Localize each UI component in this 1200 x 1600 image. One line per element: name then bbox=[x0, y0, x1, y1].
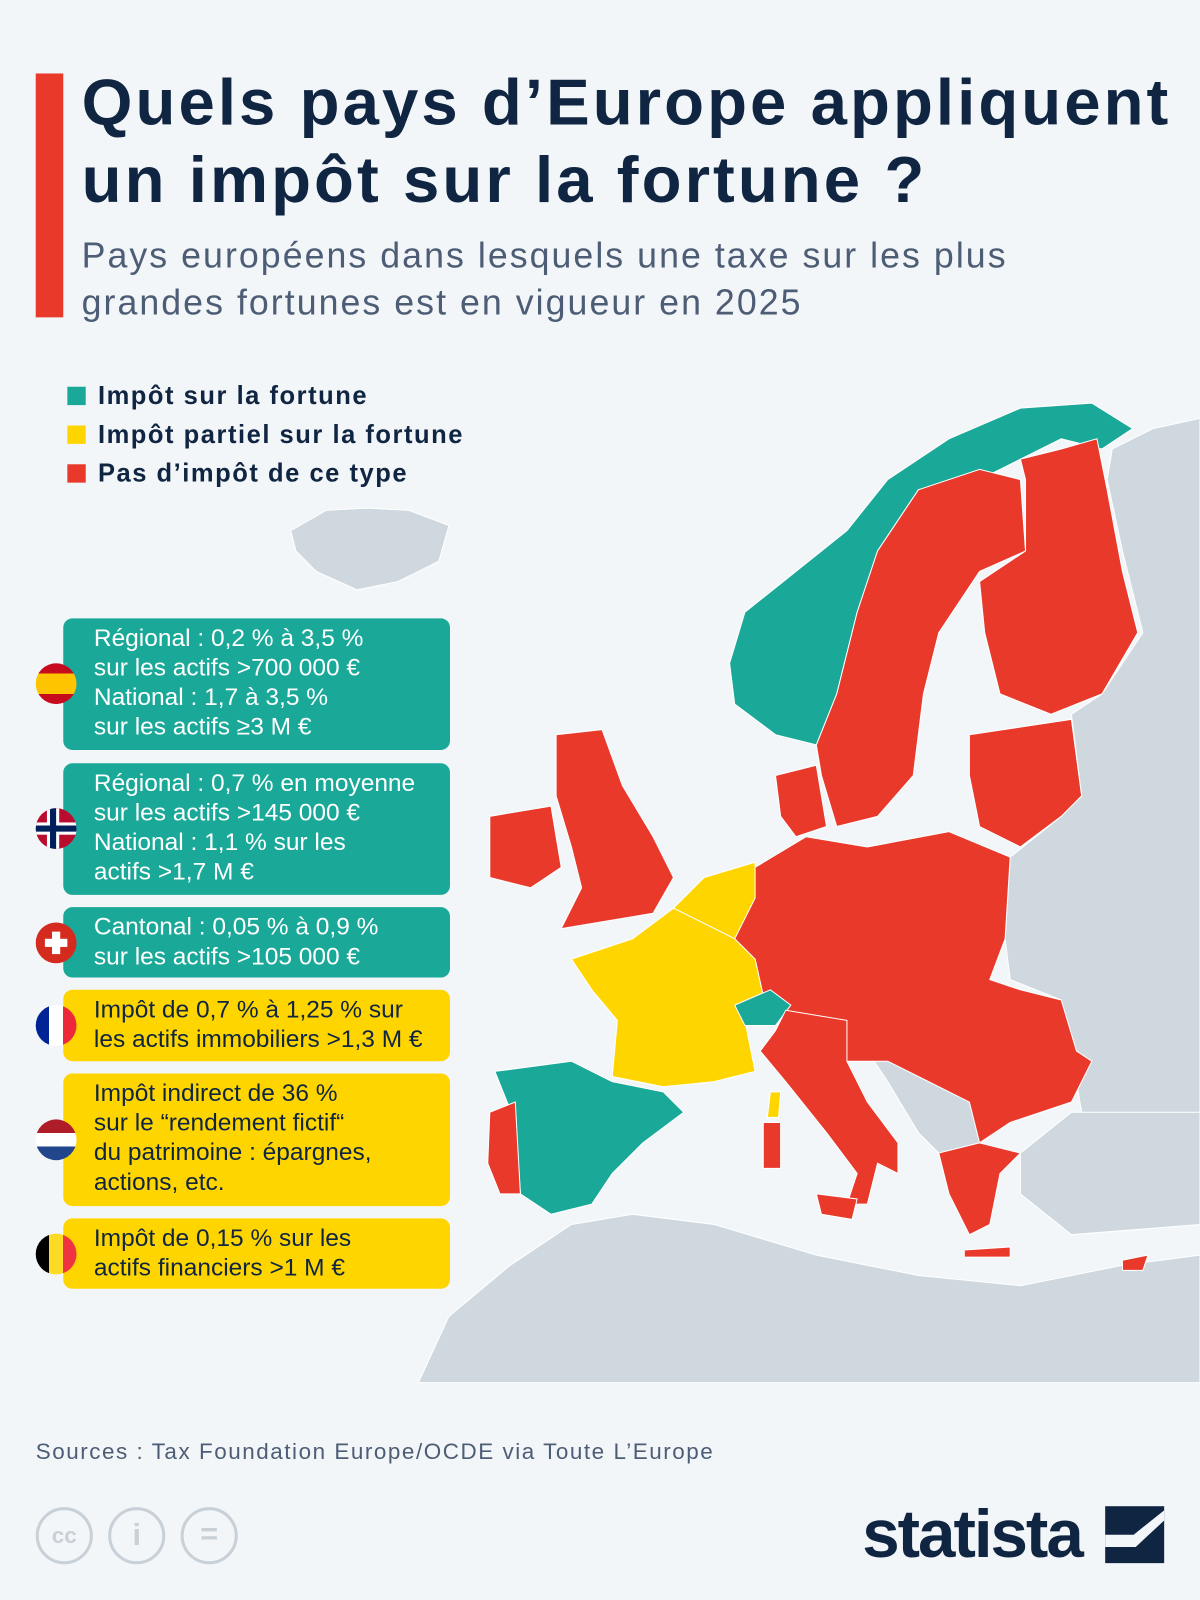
box: Switzerland bbox=[63, 907, 450, 978]
box: Norway: sur les actifs >145 000 € bbox=[94, 799, 360, 827]
subtitle: Pays européens dans lesquels une taxe sur les plus bbox=[82, 236, 1008, 276]
legend bbox=[67, 382, 464, 488]
box: Switzerland: Cantonal : 0,05 % à 0,9 % bbox=[94, 913, 378, 941]
box: Spain: National : 1,7 à 3,5 % bbox=[94, 684, 328, 711]
license icons: cc bbox=[52, 1522, 77, 1548]
box: Norway bbox=[63, 763, 450, 895]
box: Spain: sur les actifs >700 000 € bbox=[94, 654, 360, 682]
subtitle bbox=[82, 236, 1008, 322]
box: Netherlands: actions, etc. bbox=[94, 1168, 225, 1196]
box: Netherlands: du patrimoine : épargnes, bbox=[94, 1139, 372, 1166]
box: Spain bbox=[63, 618, 450, 750]
license icons: i bbox=[132, 1518, 141, 1552]
logo: statista: statista bbox=[862, 1496, 1082, 1571]
box: Netherlands bbox=[63, 1073, 450, 1206]
license icons: = bbox=[200, 1517, 218, 1551]
box: Netherlands: Impôt indirect de 36 % bbox=[94, 1080, 338, 1107]
box: France bbox=[63, 990, 450, 1061]
box: Belgium bbox=[63, 1218, 450, 1289]
box: France: les actifs immobiliers >1,3 M € bbox=[94, 1026, 423, 1053]
flag: Belgium bbox=[36, 1234, 77, 1274]
legend item: none: Pas d’impôt de ce type bbox=[98, 459, 408, 488]
flag: Norway bbox=[36, 808, 77, 849]
box: Belgium: actifs financiers >1 M € bbox=[94, 1254, 345, 1282]
title: Quels pays d’Europe appliquent bbox=[82, 65, 1171, 139]
box: Norway: National : 1,1 % sur les bbox=[94, 829, 346, 856]
legend item: partial: Impôt partiel sur la fortune bbox=[98, 420, 464, 449]
box: Spain: sur les actifs ≥3 M € bbox=[94, 713, 311, 741]
license icons bbox=[36, 1507, 238, 1564]
box: Netherlands: sur le “rendement fictif“ bbox=[94, 1109, 344, 1137]
subtitle: grandes fortunes est en vigueur en 2025 bbox=[82, 283, 803, 322]
title bbox=[82, 65, 1171, 216]
box: Spain: Régional : 0,2 % à 3,5 % bbox=[94, 624, 363, 652]
box: Norway: Régional : 0,7 % en moyenne bbox=[94, 769, 415, 797]
legend item: full tax: Impôt sur la fortune bbox=[98, 382, 368, 410]
flag: Switzerland bbox=[36, 922, 77, 963]
flag: Netherlands bbox=[36, 1119, 77, 1160]
sources: Sources : Tax Foundation Europe/OCDE via Toute L’Europe bbox=[36, 1439, 714, 1464]
flag: Spain bbox=[36, 663, 77, 704]
box: Belgium: Impôt de 0,15 % sur les bbox=[94, 1224, 351, 1252]
accent bar bbox=[36, 73, 63, 317]
box: Norway: actifs >1,7 M € bbox=[94, 858, 254, 886]
title: un impôt sur la fortune ? bbox=[82, 143, 927, 216]
box: France: Impôt de 0,7 % à 1,25 % sur bbox=[94, 996, 403, 1023]
flag: France bbox=[36, 1005, 77, 1046]
box: Switzerland: sur les actifs >105 000 € bbox=[94, 943, 360, 970]
